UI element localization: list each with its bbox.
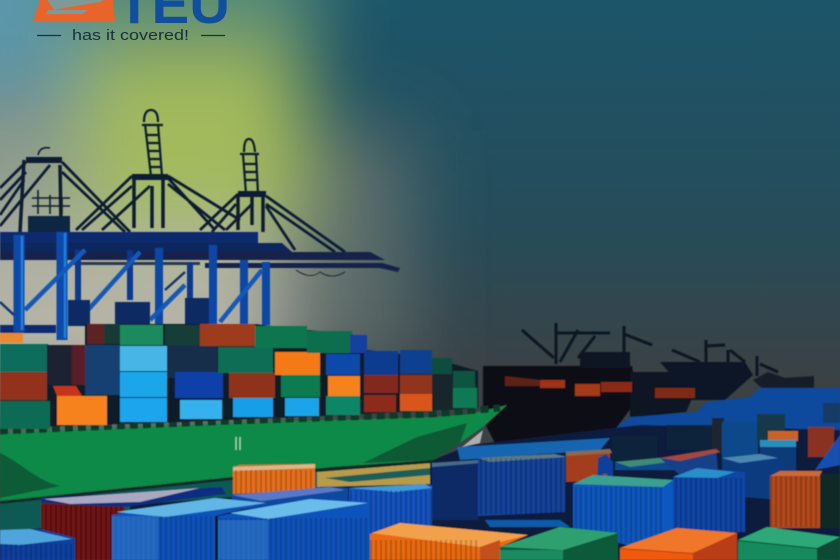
containers on ship deck: [0, 324, 478, 429]
crane rigging and towers: [0, 110, 345, 276]
water: [0, 388, 840, 560]
worker figure: [597, 454, 613, 486]
large blue containers right: [573, 468, 840, 545]
tagline rules: [37, 34, 225, 36]
crane girders: [0, 232, 400, 333]
distant ship cargo stripes: [505, 376, 695, 398]
dock containers middle: [432, 454, 570, 527]
container ship hull: [0, 405, 507, 504]
distant ship masts: [522, 323, 778, 376]
crane leg bases: [68, 298, 209, 326]
distant silhouette ships: [483, 362, 814, 443]
tagline: has it covered!: [72, 28, 189, 44]
foreground containers bottom: [370, 523, 840, 560]
logo mark: orange ship: [33, 0, 115, 22]
crane machinery cabin: [28, 216, 70, 234]
crane legs: [0, 232, 266, 340]
logo: [33, 0, 230, 44]
foreground containers left: [0, 464, 432, 560]
back containers right: [566, 403, 840, 500]
ship deck rail: [0, 408, 500, 431]
